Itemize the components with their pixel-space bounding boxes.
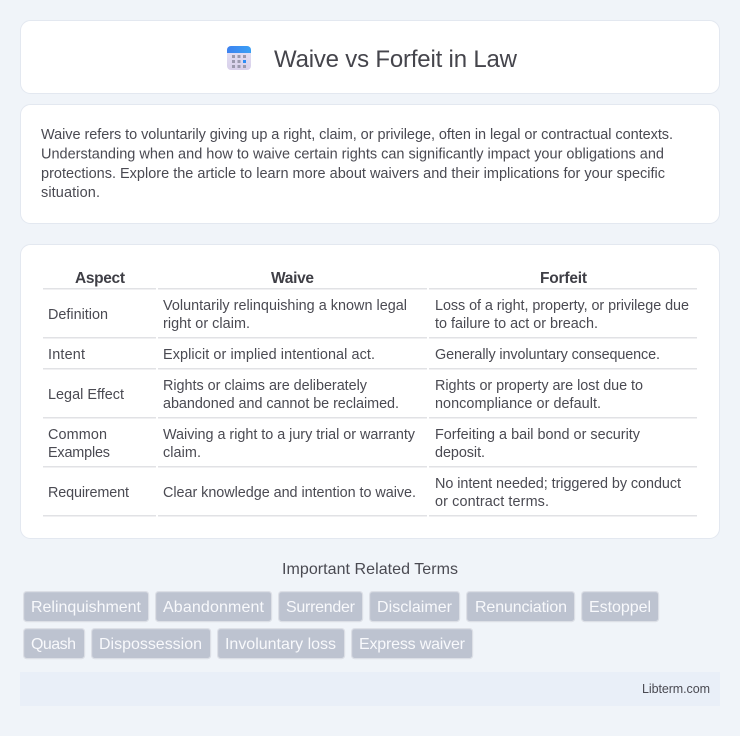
table row: requirement: or contract terms.	[435, 494, 549, 510]
table row: definition: right or claim.	[163, 316, 250, 332]
text block: definition of waive: Understanding when and how to waive certain rights can significantly impact your obligations and	[41, 146, 664, 162]
table header: Aspect	[75, 270, 125, 287]
heading: related terms: Important Related Terms	[282, 561, 458, 578]
tag: Involuntary loss	[218, 629, 345, 659]
tag: Disclaimer	[370, 592, 460, 622]
table row: legal effect: Rights or property are lost due to	[435, 378, 643, 394]
table row: common examples: Examples	[48, 445, 110, 461]
tag: Relinquishment	[24, 592, 149, 622]
panel: comparison table	[20, 244, 720, 538]
table header: Waive	[271, 270, 314, 287]
table row: legal effect: noncompliance or default.	[435, 396, 601, 412]
table row: definition: Definition	[48, 307, 108, 323]
tag: Surrender	[279, 592, 363, 622]
footer credit: Libterm.com	[642, 682, 710, 696]
text block: definition of waive: Waive refers to voluntarily giving up a right, claim, or privilege, often in legal or contractual contexts.	[41, 127, 673, 143]
tag: Express waiver	[352, 629, 473, 659]
table header: Forfeit	[540, 270, 587, 287]
tag: Surrender: Surrender	[286, 599, 356, 616]
table row: intent: Explicit or implied intentional act.	[163, 347, 375, 363]
table row: definition	[48, 298, 689, 332]
title: Waive vs Forfeit in Law	[274, 46, 518, 73]
table row: common examples: Common	[48, 427, 107, 443]
tag: Express waiver: Express waiver	[359, 636, 466, 653]
table row: common examples: claim.	[163, 445, 201, 461]
tag: Estoppel: Estoppel	[589, 599, 651, 616]
table row: legal effect: Rights or claims are deliberately	[163, 378, 368, 394]
table row: definition: Voluntarily relinquishing a known legal	[163, 298, 407, 314]
tag: Dispossession	[92, 629, 211, 659]
table row: legal effect: abandoned and cannot be reclaimed.	[163, 396, 399, 412]
table row: definition: Loss of a right, property, or privilege due	[435, 298, 689, 314]
table row: common examples: deposit.	[435, 445, 485, 461]
table row: intent: Generally involuntary consequence.	[435, 347, 660, 363]
tag: Estoppel	[582, 592, 659, 622]
table row: requirement: Clear knowledge and intention to waive.	[163, 485, 416, 501]
table row: common examples: Waiving a right to a jury trial or warranty	[163, 427, 416, 443]
table header	[75, 270, 587, 287]
table row: legal effect: Legal Effect	[48, 387, 124, 403]
table row: requirement: Requirement	[48, 485, 129, 501]
table row: intent: Intent	[48, 347, 85, 363]
tag: Abandonment	[156, 592, 272, 622]
tag: Relinquishment: Relinquishment	[31, 599, 142, 616]
table row: definition: to failure to act or breach.	[435, 316, 598, 332]
table row: legal effect	[48, 378, 643, 412]
text block: definition of waive: protections. Explore the article to learn more about waivers and their implications for your specific	[41, 166, 665, 182]
tag: Renunciation: Renunciation	[475, 599, 567, 616]
tag: Disclaimer: Disclaimer	[377, 599, 453, 616]
tag: Quash: Quash	[31, 636, 76, 653]
tag: Dispossession: Dispossession	[99, 636, 202, 653]
tag: Quash	[24, 629, 85, 659]
icon: calendar	[227, 46, 251, 70]
table row: requirement	[48, 476, 681, 510]
panel: intro text	[20, 104, 720, 224]
footer	[20, 672, 720, 706]
tag: Renunciation	[467, 592, 575, 622]
table row: intent	[48, 347, 660, 363]
tag: Abandonment: Abandonment	[163, 599, 265, 616]
tag: Involuntary loss: Involuntary loss	[225, 636, 336, 653]
table row: common examples	[48, 427, 641, 461]
panel: header	[20, 20, 720, 94]
tags: related terms	[24, 592, 659, 659]
text block: definition of waive: situation.	[41, 185, 100, 201]
table row: common examples: Forfeiting a bail bond or security	[435, 427, 641, 443]
text block: definition of waive	[41, 127, 673, 201]
table row: requirement: No intent needed; triggered by conduct	[435, 476, 681, 492]
